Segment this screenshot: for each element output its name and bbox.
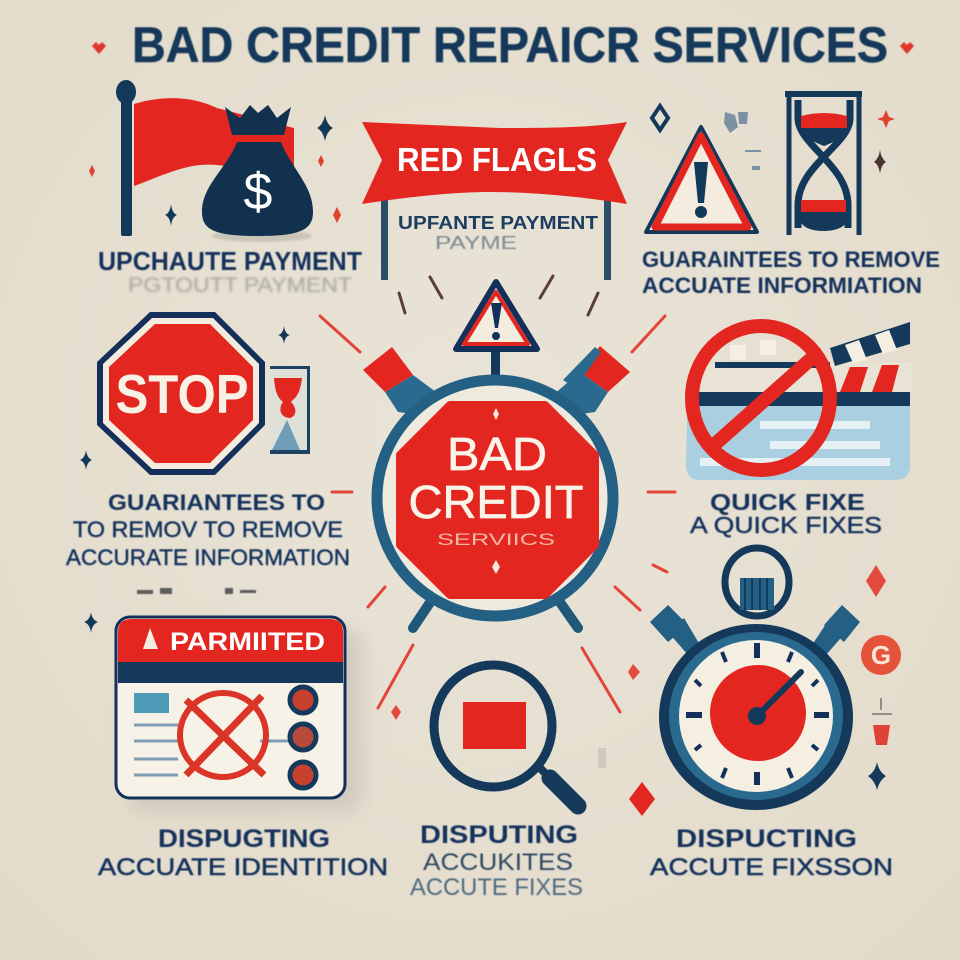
captions: bottom right: DISPUCTING bbox=[676, 825, 857, 853]
decorative red rays bbox=[320, 276, 675, 712]
caption: guarantees to remove: ACCUATE INFORMIATION bbox=[642, 273, 922, 298]
title: BAD CREDIT REPAICR SERVICES bbox=[132, 17, 888, 73]
icon: red flag and money bag: $ bbox=[244, 163, 273, 221]
clock body bbox=[377, 380, 613, 616]
icon: hourglass bbox=[652, 94, 895, 235]
clock: central alarm clock bbox=[363, 282, 630, 628]
clock label: BAD bbox=[447, 428, 547, 480]
caption: quick fixes: QUICK FIXE bbox=[710, 489, 865, 515]
banner: red flags: UPFANTE PAYMENT bbox=[398, 213, 598, 233]
clock bells bbox=[363, 346, 630, 415]
caption: guarantees left: GUARIANTEES TO bbox=[108, 490, 325, 515]
caption: upfront payment bbox=[98, 246, 362, 297]
icon: magnifying glass bbox=[434, 665, 578, 806]
icon: warning triangle bbox=[646, 127, 757, 232]
captions: bottom center: ACCUTE FIXES bbox=[410, 874, 583, 901]
clock legs bbox=[413, 598, 578, 628]
caption: guarantees left: ACCURATE INFORMATION bbox=[66, 545, 350, 570]
icon: red flag and money bag bbox=[89, 80, 341, 242]
captions: bottom left: DISPUGTING bbox=[158, 825, 330, 853]
captions: bottom left: ACCUATE IDENTITION bbox=[98, 854, 388, 881]
caption: guarantees to remove: GUARAINTEES TO REMOVE bbox=[642, 247, 940, 272]
icon: stop sign: STOP bbox=[116, 363, 248, 425]
banner: red flags: RED FLAGLS bbox=[397, 141, 597, 178]
captions: bottom left bbox=[98, 825, 388, 881]
captions: bottom center bbox=[410, 821, 583, 901]
caption: quick fixes: A QUICK FIXES bbox=[690, 512, 882, 538]
clock label: SERVIICS bbox=[437, 530, 555, 549]
caption: guarantees left: TO REMOV TO REMOVE bbox=[73, 517, 343, 542]
captions: bottom right: ACCUTE FIXSSON bbox=[650, 854, 893, 881]
captions: bottom center: ACCUKITES bbox=[423, 849, 573, 876]
banner: red flags bbox=[362, 122, 627, 280]
clock label bbox=[408, 428, 584, 549]
captions: bottom right bbox=[650, 825, 893, 881]
captions: bottom center: DISPUTING bbox=[420, 821, 578, 849]
caption: upfront payment: UPCHAUTE PAYMENT bbox=[98, 246, 362, 276]
icon: right side decorations bbox=[391, 565, 901, 816]
icon: sparkles bbox=[80, 326, 290, 633]
caption: guarantees left bbox=[66, 490, 350, 570]
clock label: CREDIT bbox=[408, 476, 584, 528]
icon: stop sign bbox=[97, 312, 265, 475]
icon: right side decorations: G bbox=[871, 640, 891, 670]
icon: permitted card: PARMIITED bbox=[170, 628, 325, 656]
caption: guarantees to remove bbox=[642, 247, 940, 298]
icon: permitted card bbox=[116, 617, 362, 812]
icon: small hourglass bbox=[270, 366, 310, 454]
clock warning triangle bbox=[456, 282, 537, 349]
caption: quick fixes bbox=[690, 489, 882, 538]
banner: red flags: PAYME bbox=[435, 233, 517, 253]
icon: clapperboard with prohibition bbox=[686, 322, 912, 480]
caption: upfront payment: PGTOUTT PAYMENT bbox=[128, 274, 352, 297]
icon: stopwatch bbox=[650, 548, 860, 810]
